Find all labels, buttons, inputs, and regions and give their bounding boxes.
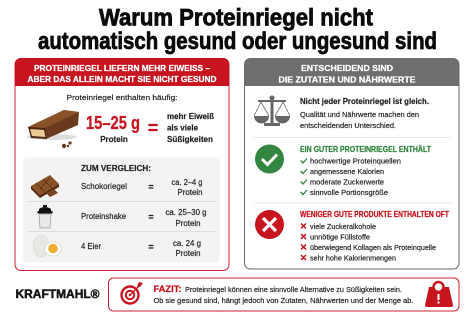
logo: KRAFTMAHL: KRAFTMAHL®	[16, 287, 100, 301]
good bar list: hochwertige Proteinquellen	[310, 156, 401, 166]
right panel header	[244, 58, 459, 86]
good bar list: moderate Zuckerwerte	[310, 178, 384, 186]
good bar list: EIN GUTER PROTEINRIEGEL ENTHÄLT	[300, 145, 431, 154]
protein amount: 15–25 g	[86, 113, 140, 133]
row: chocolate bar: ca. 2–4 g	[172, 178, 202, 187]
row: protein shake	[38, 205, 206, 228]
more protein text: als viele	[167, 124, 199, 132]
left panel header: PROTEINRIEGEL LIEFERN MEHR EIWEISS –	[34, 64, 210, 73]
bad bar list: überwiegend Kollagen als Proteinquelle	[310, 243, 436, 252]
good bar list: sinnvolle Portionsgröße	[310, 188, 388, 197]
title: Warum Proteinriegel nicht	[99, 4, 373, 32]
row: chocolate bar: Protein	[178, 188, 202, 197]
icon: scales	[254, 96, 290, 126]
icon: protein bar	[27, 110, 79, 148]
more protein text: mehr Eiweiß	[167, 112, 214, 121]
icon: target	[122, 282, 143, 304]
row: eggs: =	[148, 242, 154, 252]
scales text: Nicht jeder Proteinriegel ist gleich.	[300, 96, 429, 106]
right panel header: ENTSCHEIDEND SIND	[301, 64, 393, 73]
icon: red cross	[255, 210, 284, 239]
row: eggs: 4 Eier	[81, 242, 101, 251]
title	[38, 4, 437, 55]
row: chocolate bar: =	[148, 182, 154, 192]
scales text: Qualität und Nährwerte machen den	[300, 110, 419, 119]
good bar list: angemessene Kalorien	[310, 167, 384, 176]
conclusion text	[154, 284, 414, 305]
comparison heading: ZUM VERGLEICH:	[81, 164, 151, 173]
bad bar list: WENIGER GUTE PRODUKTE ENTHALTEN OFT	[300, 210, 449, 219]
panel: protein bars	[15, 58, 229, 270]
intro text: Proteinriegel enthalten häufig:	[66, 93, 178, 102]
conclusion text: Proteinriegel können eine sinnvolle Alternative zu Süßigkeiten sein.	[185, 285, 402, 294]
panel: conclusion	[108, 278, 459, 311]
panel: comparison	[23, 158, 220, 262]
bad bar list	[300, 210, 449, 262]
row: eggs: Protein	[176, 249, 200, 258]
icon: warning weight	[425, 282, 453, 307]
left panel header	[15, 58, 229, 86]
scales text: entscheidenden Unterschied.	[300, 121, 396, 130]
more protein text	[167, 112, 214, 144]
panel: ingredients and nutrients	[244, 58, 459, 269]
icon: green check	[255, 144, 284, 174]
row: protein shake: ca. 25–30 g	[166, 208, 206, 217]
row: chocolate bar: Schokoriegel	[81, 182, 127, 191]
bad bar list: sehr hohe Kalorienmengen	[310, 254, 396, 262]
row: protein shake: =	[148, 212, 154, 222]
row: protein shake: Protein	[176, 219, 200, 228]
row: chocolate bar	[31, 175, 202, 198]
bad bar list: viele Zuckeralkohole	[310, 222, 376, 231]
row: eggs: ca. 24 g	[173, 239, 201, 248]
equals sign: =	[148, 118, 158, 138]
conclusion text: FAZIT:	[154, 284, 182, 294]
good bar list	[300, 145, 431, 197]
row: protein shake: Proteinshake	[81, 212, 126, 221]
bad bar list: unnötige Füllstoffe	[310, 232, 370, 242]
left panel header: ABER DAS ALLEIN MACHT SIE NICHT GESUND	[28, 75, 217, 84]
scales text	[300, 96, 429, 130]
right panel header: DIE ZUTATEN UND NÄHRWERTE	[278, 74, 416, 84]
conclusion text: Ob sie gesund sind, hängt jedoch von Zutaten, Nährwerten und der Menge ab.	[154, 296, 414, 305]
protein label: Protein	[100, 135, 128, 144]
more protein text: Süßigkeiten	[167, 135, 213, 144]
row: eggs	[33, 235, 201, 258]
